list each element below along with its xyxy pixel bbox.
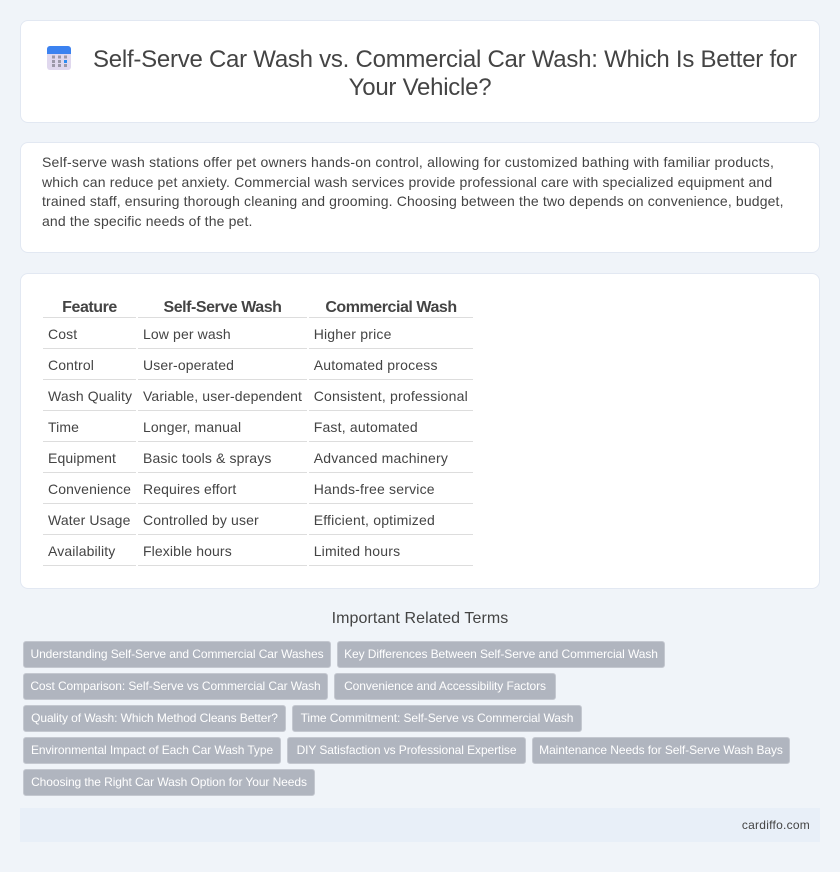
related term tags: Quality of Wash: Which Method Cleans Better?: [31, 711, 278, 725]
comparison table: Hands-free service: [314, 480, 435, 496]
comparison table: [43, 299, 473, 566]
comparison table: Wash Quality: [48, 388, 132, 404]
related term tags: [23, 641, 790, 796]
comparison table: Commercial Wash: [325, 299, 457, 316]
comparison table: Advanced machinery: [314, 450, 448, 466]
comparison table: Higher price: [314, 326, 392, 342]
related term tags: DIY Satisfaction vs Professional Expertise: [297, 743, 516, 757]
comparison table: Control: [48, 356, 94, 372]
related term tags: Convenience and Accessibility Factors: [344, 679, 546, 693]
related term tags: Key Differences Between Self-Serve and Commercial Wash: [344, 647, 658, 661]
comparison table: Flexible hours: [143, 542, 232, 558]
comparison table: Feature: [62, 299, 117, 316]
comparison table: Efficient, optimized: [314, 512, 435, 528]
related term tags: Choosing the Right Car Wash Option for Your Needs: [31, 775, 307, 789]
comparison table: Low per wash: [143, 326, 231, 342]
comparison table: Basic tools & sprays: [143, 450, 271, 466]
related term tags: Understanding Self-Serve and Commercial Car Washes: [30, 647, 324, 661]
comparison table: Consistent, professional: [314, 388, 468, 404]
comparison table: Automated process: [314, 356, 438, 372]
text block: intro paragraph: [42, 154, 784, 229]
comparison table: Time: [48, 418, 79, 434]
comparison table: Limited hours: [314, 542, 400, 558]
related term tags: Maintenance Needs for Self-Serve Wash Bays: [539, 743, 783, 757]
comparison table: Requires effort: [143, 480, 236, 496]
footer bar: [20, 808, 820, 842]
panel: comparison table: [20, 273, 820, 589]
icon: calendar: [47, 46, 71, 70]
heading: related terms: Important Related Terms: [332, 610, 508, 627]
comparison table: Availability: [48, 542, 115, 558]
title: line 1: Self-Serve Car Wash vs. Commercial Car Wash: Which Is Better for: [93, 46, 797, 73]
comparison table: User-operated: [143, 356, 234, 372]
comparison table: Self-Serve Wash: [163, 299, 282, 316]
related term tags: Cost Comparison: Self-Serve vs Commercial Car Wash: [30, 679, 321, 693]
panel: intro text: [20, 142, 820, 253]
panel: title header: [20, 20, 820, 123]
comparison table: Controlled by user: [143, 512, 259, 528]
comparison table: Convenience: [48, 480, 131, 496]
comparison table: Cost: [48, 326, 77, 342]
footer: site name: cardiffo.com: [742, 818, 810, 832]
comparison table: Fast, automated: [314, 418, 418, 434]
related term tags: Time Commitment: Self-Serve vs Commercial Wash: [301, 711, 573, 725]
comparison table: Variable, user-dependent: [143, 388, 302, 404]
comparison table: Longer, manual: [143, 418, 241, 434]
title: line 2: Your Vehicle?: [349, 74, 491, 101]
text block: intro paragraph: which can reduce pet anxiety. Commercial wash services provide professional care with specialized equipment and: [42, 174, 772, 190]
text block: intro paragraph: and the specific needs of the pet.: [42, 213, 253, 229]
comparison table: Water Usage: [48, 512, 130, 528]
text block: intro paragraph: Self-serve wash stations offer pet owners hands-on control, allowing for customized bathing with familiar products,: [42, 154, 774, 170]
comparison table: Equipment: [48, 450, 116, 466]
related term tags: Environmental Impact of Each Car Wash Type: [31, 743, 273, 757]
text block: intro paragraph: trained staff, ensuring thorough cleaning and grooming. Choosing between the two depends on convenience, budget,: [42, 193, 784, 209]
